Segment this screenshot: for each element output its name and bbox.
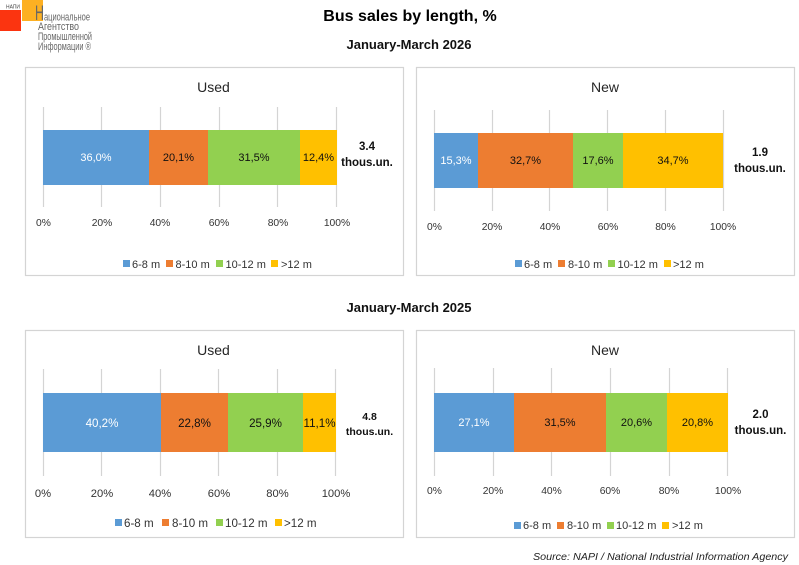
legend: new 2025: 8-10 m: [567, 520, 601, 532]
legend: new 2026: 10-12 m: [618, 259, 658, 271]
legend: used 2025: 8-10 m: [172, 517, 208, 530]
legend: used 2026: 10-12 m: [226, 259, 266, 271]
grid lines and axis labels: used 2025: 40%: [149, 488, 171, 500]
stacked bar: used 2025: 40,2%: [86, 417, 118, 430]
total: used 2026: 3.4: [359, 141, 376, 153]
grid lines and axis labels: new 2026: 0%: [427, 222, 442, 233]
legend: used 2026: >12 m: [281, 259, 312, 271]
panel: used 2025: [26, 330, 404, 538]
stacked bar: new 2025: 20,6%: [621, 417, 652, 429]
stacked bar: new 2025: 27,1%: [458, 417, 490, 429]
grid lines and axis labels: new 2026: 80%: [655, 222, 676, 233]
total: used 2025: 4.8: [362, 411, 377, 423]
stacked bar: new 2025: 20,8%: [682, 417, 713, 429]
legend: used 2026: 8-10 m: [176, 259, 210, 271]
legend: used 2026: [123, 259, 312, 271]
stacked bar: new 2026: 15,3%: [440, 155, 472, 167]
panel heading: used 2026: Used: [197, 79, 230, 95]
grid lines and axis labels: used 2026: [36, 107, 350, 229]
grid lines and axis labels: used 2026: 0%: [36, 218, 51, 229]
legend: new 2026: [515, 259, 704, 271]
subtitle: January-March 2025: January-March 2025: [346, 300, 472, 315]
grid lines and axis labels: new 2025: [427, 368, 741, 497]
grid lines and axis labels: new 2026: 20%: [482, 222, 502, 233]
stacked bar: new 2026: 17,6%: [582, 155, 614, 167]
logo: NAPI: Агентство: [38, 21, 79, 33]
grid lines and axis labels: used 2026: 40%: [150, 218, 170, 229]
title: Bus sales by length, %: [323, 8, 497, 25]
legend: used 2025: 10-12 m: [225, 517, 268, 530]
grid lines and axis labels: used 2026: 100%: [324, 218, 350, 229]
total: new 2025: thous.un.: [735, 425, 786, 437]
stacked bar: new 2026: [434, 133, 723, 188]
total: used 2026: thous.un.: [341, 157, 393, 169]
stacked bar: used 2026: 12,4%: [303, 152, 334, 164]
logo: NAPI: НАПИ: [6, 4, 20, 10]
stacked bar: used 2026: 36,0%: [80, 152, 112, 164]
stacked bar: used 2025: [43, 393, 336, 452]
stacked bar: used 2026: 20,1%: [163, 152, 194, 164]
panel: new 2026: [416, 68, 794, 276]
panel heading: new 2026: New: [591, 79, 620, 95]
grid lines and axis labels: new 2025: 40%: [541, 486, 562, 497]
grid lines and axis labels: used 2025: 20%: [91, 488, 113, 500]
legend: new 2025: 10-12 m: [616, 520, 656, 532]
grid lines and axis labels: used 2025: [35, 369, 350, 500]
grid lines and axis labels: new 2025: 60%: [600, 486, 620, 497]
grid lines and axis labels: new 2025: 100%: [715, 486, 741, 497]
panel: new 2025: [416, 330, 794, 538]
grid lines and axis labels: used 2026: 80%: [268, 218, 288, 229]
grid lines and axis labels: used 2025: 100%: [322, 488, 350, 500]
legend: new 2026: 6-8 m: [524, 259, 552, 271]
grid lines and axis labels: new 2026: 40%: [540, 222, 560, 233]
total: used 2025: [346, 411, 393, 438]
stacked bar: new 2025: 31,5%: [544, 417, 576, 429]
panel: used 2026: [26, 68, 404, 276]
legend: new 2026: 8-10 m: [568, 259, 602, 271]
legend: new 2025: 6-8 m: [523, 520, 551, 532]
grid lines and axis labels: used 2025: 0%: [35, 488, 51, 500]
logo: NAPI: Н: [35, 2, 44, 25]
stacked bar: used 2025: 22,8%: [178, 417, 211, 430]
panel heading: used 2025: Used: [197, 342, 230, 358]
grid lines and axis labels: new 2026: [427, 110, 736, 233]
legend: new 2025: [514, 520, 703, 532]
logo: NAPI: Промышленной: [38, 31, 92, 43]
legend: new 2025: >12 m: [672, 520, 703, 532]
stacked bar: new 2026: 34,7%: [657, 155, 689, 167]
legend: used 2025: >12 m: [284, 517, 317, 530]
total: new 2025: 2.0: [752, 409, 768, 421]
total: used 2025: thous.un.: [346, 426, 393, 438]
logo: NAPI: [0, 0, 92, 53]
grid lines and axis labels: new 2025: 20%: [483, 486, 503, 497]
grid lines and axis labels: used 2025: 60%: [208, 488, 230, 500]
legend: used 2026: 6-8 m: [132, 259, 160, 271]
total: new 2026: 1.9: [752, 147, 768, 159]
stacked bar: used 2025: 25,9%: [249, 417, 282, 430]
legend: used 2025: 6-8 m: [124, 517, 154, 530]
stacked bar: new 2026: 32,7%: [510, 155, 541, 167]
grid lines and axis labels: new 2026: 60%: [598, 222, 618, 233]
logo: NAPI: Информации ®: [38, 41, 91, 53]
total: used 2026: [341, 141, 393, 169]
grid lines and axis labels: used 2025: 80%: [266, 488, 289, 500]
grid lines and axis labels: used 2026: 20%: [92, 218, 112, 229]
panel heading: new 2025: New: [591, 342, 620, 358]
source note: Source: NAPI / National Industrial Information Agency: [533, 551, 789, 563]
stacked bar: used 2026: [43, 130, 337, 185]
legend: used 2025: [115, 517, 317, 530]
legend: new 2026: >12 m: [673, 259, 704, 271]
stacked bar: new 2025: [434, 393, 728, 452]
grid lines and axis labels: new 2025: 80%: [659, 486, 679, 497]
total: new 2025: [735, 409, 786, 437]
grid lines and axis labels: new 2025: 0%: [427, 486, 442, 497]
stacked bar: used 2025: 11,1%: [303, 417, 336, 430]
grid lines and axis labels: used 2026: 60%: [209, 218, 229, 229]
grid lines and axis labels: new 2026: 100%: [710, 222, 736, 233]
total: new 2026: [734, 147, 786, 175]
logo: NAPI: ациональное: [44, 12, 90, 24]
stacked bar: used 2026: 31,5%: [238, 152, 270, 164]
total: new 2026: thous.un.: [734, 163, 786, 175]
subtitle: January-March 2026: January-March 2026: [346, 37, 472, 52]
